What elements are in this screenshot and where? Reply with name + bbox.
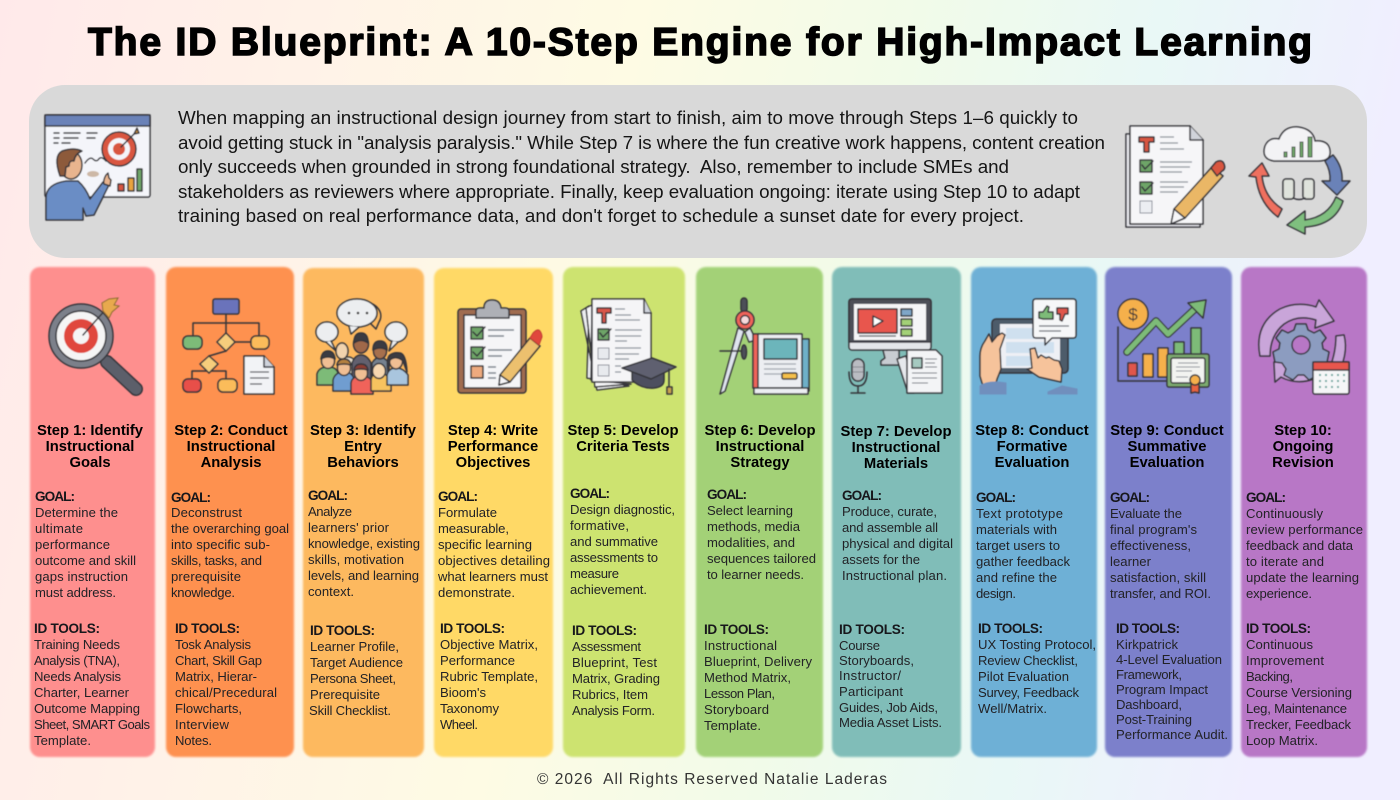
id tools text: Storyboard: [704, 702, 769, 717]
goal text: achievement.: [570, 582, 647, 597]
icon: ROI chart and certificate: [1118, 299, 1209, 393]
icon: revision cycle with gear and calendar: [1259, 300, 1349, 394]
heading: Step 4: Write: [448, 423, 538, 439]
id tools text: Objective Matrix,: [440, 637, 538, 652]
heading: Step 9: Conduct: [1110, 423, 1224, 439]
id tools text: Improvement: [1246, 653, 1324, 668]
id tools text: Persona Sheet,: [310, 671, 396, 686]
heading: Step 8: Conduct: [975, 423, 1089, 439]
id tools text: Course Versioning: [1246, 685, 1352, 700]
heading: Instructional: [716, 439, 804, 455]
goal text: specific learning: [438, 537, 532, 552]
goal text: demonstrate.: [438, 585, 515, 600]
icon: test papers and graduation cap: [581, 299, 676, 394]
id tools text: ID TOOLS:: [1116, 621, 1180, 636]
goal text: ultimate: [35, 521, 83, 536]
goal text: prerequisite: [171, 569, 241, 584]
goal text: modalities, and: [707, 535, 795, 550]
id tools text: Rubrics, Item: [572, 687, 648, 702]
heading: Materials: [864, 456, 928, 472]
step 4 column: [434, 268, 553, 757]
goal text: GOAL:: [35, 489, 75, 504]
icon: checklist and pencil: [1126, 126, 1225, 227]
goal text: GOAL:: [1246, 490, 1286, 505]
id tools text: Analysis Form.: [572, 703, 655, 718]
heading: Step 6: Develop: [704, 423, 816, 439]
id tools text: ID TOOLS:: [440, 621, 505, 636]
heading: [174, 423, 288, 471]
id tools text: ID TOOLS:: [34, 621, 100, 636]
id tools text: Template.: [704, 718, 761, 733]
icon: ROI chart and certificate: $: [1128, 305, 1138, 324]
goal text: Design diagnostic,: [570, 502, 675, 517]
goal text: transfer, and ROI.: [1110, 586, 1211, 601]
heading: [37, 423, 144, 471]
goal text: effectiveness,: [1110, 538, 1191, 553]
id tools text: ID TOOLS:: [310, 623, 375, 638]
goal text: and assemble all: [842, 520, 938, 535]
id tools text: Interview: [175, 717, 230, 732]
heading: [975, 423, 1089, 471]
goal text: Determine the: [35, 505, 118, 520]
intro text: [178, 107, 1105, 226]
goal text: [976, 490, 1070, 601]
id tools text: Training Needs: [34, 637, 120, 652]
goal text: objectives detailing: [438, 553, 550, 568]
id tools text: Taxonomy: [440, 701, 499, 716]
heading: Objectives: [456, 455, 530, 471]
id tools text: Tosk Analysis: [175, 637, 251, 652]
goal text: [437, 489, 550, 600]
goal text: satisfaction, skill: [1110, 570, 1206, 585]
id tools text: Notes.: [175, 733, 212, 748]
goal text: target users to: [976, 538, 1060, 553]
heading: Evaluation: [1130, 455, 1204, 471]
id tools text: Lesson Plan,: [704, 686, 775, 701]
id tools text: Framework,: [1116, 667, 1182, 682]
goal text: gather feedback: [976, 554, 1070, 569]
id tools text: Guides, Job Aids,: [839, 700, 938, 715]
id tools text: [309, 623, 403, 718]
intro text: When mapping an instructional design journey from start to finish, aim to move through Steps 1–6 quickly to: [178, 107, 1078, 128]
icon: target magnifier: [49, 298, 136, 389]
goal text: [1246, 490, 1363, 601]
id tools text: Bioom's: [440, 685, 486, 700]
heading: [840, 424, 952, 472]
goal text: Formulate: [438, 505, 497, 520]
icon: compass and book: [720, 298, 809, 394]
heading: [1272, 423, 1334, 471]
id tools text: [704, 622, 812, 733]
id tools text: [1246, 621, 1352, 748]
intro text: only succeeds when grounded in strong foundational strategy. Also, remember to include SMEs and: [178, 156, 1009, 177]
heading: Revision: [1272, 455, 1334, 471]
goal text: knowledge, existing: [308, 536, 420, 551]
id tools text: Learner Profile,: [310, 639, 399, 654]
goal text: assets for the: [842, 552, 920, 567]
heading: [448, 423, 538, 471]
id tools text: Template.: [34, 733, 91, 748]
heading: Step 5: Develop: [567, 423, 679, 439]
heading: Analysis: [201, 455, 261, 471]
id tools text: Storyboards,: [839, 653, 914, 668]
goal text: measure: [570, 566, 619, 581]
id tools text: Program Impact: [1116, 682, 1208, 697]
goal text: levels, and learning: [308, 568, 419, 583]
id tools text: Pilot Evaluation: [978, 669, 1069, 684]
goal text: context.: [308, 584, 354, 599]
heading: [310, 423, 417, 471]
id tools text: ID TOOLS:: [704, 622, 769, 637]
goal text: sequences tailored: [707, 551, 816, 566]
id tools text: Target Audience: [310, 655, 403, 670]
goal text: to iterate and: [1246, 554, 1324, 569]
goal text: GOAL:: [842, 488, 882, 503]
id tools text: Instructor/: [839, 668, 901, 683]
heading: Entry: [344, 439, 383, 455]
goal text: into specific sub-: [171, 537, 270, 552]
footer: © 2026 All Rights Reserved Natalie Laderas: [537, 771, 887, 788]
goal text: design.: [976, 586, 1016, 601]
heading: Strategy: [730, 455, 790, 471]
heading: Performance: [448, 439, 538, 455]
goal text: GOAL:: [976, 490, 1016, 505]
heading: Criteria Tests: [576, 439, 670, 455]
id tools text: 4-Level Evaluation: [1116, 652, 1222, 667]
heading: Formative: [997, 439, 1067, 455]
goal text: update the learning: [1246, 570, 1359, 585]
goal text: GOAL:: [707, 487, 747, 502]
intro text: avoid getting stuck in "analysis paralysis." While Step 7 is where the fun creative work happens, content creation: [178, 132, 1105, 153]
step 2 column: [166, 267, 294, 757]
id tools text: Media Asset Lists.: [839, 715, 942, 730]
goal text: Text prototype: [976, 506, 1063, 521]
id tools text: Post-Training: [1116, 712, 1192, 727]
id tools text: Survey, Feedback: [978, 685, 1079, 700]
id tools text: Blueprint, Test: [572, 655, 657, 670]
icon: learners group: [316, 299, 408, 394]
heading: [704, 423, 816, 471]
heading: Step 1: Identify: [37, 423, 144, 439]
id tools text: Prerequisite: [310, 687, 380, 702]
goal text: review performance: [1246, 522, 1363, 537]
goal text: GOAL:: [308, 488, 348, 503]
id tools text: [34, 621, 150, 748]
icon: tablet with feedback bubble: [980, 299, 1077, 394]
goal text: GOAL:: [171, 490, 211, 505]
goal text: experience.: [1246, 586, 1312, 601]
id tools text: ID TOOLS:: [978, 621, 1043, 636]
id tools text: [978, 621, 1096, 716]
id tools text: [839, 622, 942, 730]
id tools text: Leg, Maintenance: [1246, 701, 1347, 716]
heading: Summative: [1128, 439, 1206, 455]
goal text: knowledge.: [171, 585, 235, 600]
id tools text: ID TOOLS:: [572, 623, 637, 638]
heading: Behaviors: [327, 455, 399, 471]
id tools text: Course: [839, 638, 880, 653]
icon: clipboard checklist: [458, 300, 542, 393]
goal text: GOAL:: [438, 489, 478, 504]
id tools text: UX Tosting Protocol,: [978, 637, 1096, 652]
goal text: and refine the: [976, 570, 1057, 585]
id tools text: Blueprint, Delivery: [704, 654, 812, 669]
goal text: Continuously: [1246, 506, 1323, 521]
id tools text: Analysis (TNA),: [34, 653, 120, 668]
icon: flowchart: [183, 299, 274, 394]
id tools text: [440, 621, 538, 732]
id tools text: Wheel.: [440, 717, 478, 732]
goal text: Select learning: [707, 503, 793, 518]
heading: [1110, 423, 1224, 471]
heading: Evaluation: [995, 455, 1069, 471]
goal text: measurable,: [438, 521, 509, 536]
icon: data cycle: [1249, 127, 1350, 234]
id tools text: Backing,: [1246, 669, 1293, 684]
step 10 column: [1241, 267, 1367, 757]
goal text: formative,: [570, 518, 629, 533]
heading: Step 10:: [1274, 423, 1332, 439]
goal text: Evaluate the: [1110, 506, 1182, 521]
id tools text: Trecker, Feedback: [1246, 717, 1351, 732]
goal text: performance: [35, 537, 110, 552]
goal text: methods, media: [707, 519, 801, 534]
step 6 column: [696, 267, 823, 757]
heading: Instructional: [852, 440, 940, 456]
step 1 column: [30, 267, 155, 757]
id tools text: Charter, Learner: [34, 685, 130, 700]
step 5 column: [563, 267, 685, 757]
id tools text: [1116, 621, 1228, 742]
id tools text: chical/Precedural: [175, 685, 277, 700]
title: The ID Blueprint: A 10-Step Engine for High-Impact Learning: [88, 21, 1312, 64]
goal text: assessments to: [570, 550, 658, 565]
heading: Step 7: Develop: [840, 424, 952, 440]
goal text: to learner needs.: [707, 567, 804, 582]
id tools text: Rubric Template,: [440, 669, 538, 684]
goal text: GOAL:: [570, 486, 610, 501]
id tools text: [175, 621, 277, 748]
heading: Ongoing: [1273, 439, 1333, 455]
id tools text: ID TOOLS:: [1246, 621, 1311, 636]
heading: Goals: [69, 455, 111, 471]
id tools text: Method Matrix,: [704, 670, 791, 685]
id tools text: Sheet, SMART Goals: [34, 717, 150, 732]
goal text: and summative: [570, 534, 658, 549]
goal text: final program's: [1110, 522, 1197, 537]
goal text: GOAL:: [1110, 490, 1150, 505]
id tools text: Performance Audit.: [1116, 727, 1228, 742]
heading: Instructional: [187, 439, 275, 455]
goal text: Instructional plan.: [842, 568, 947, 583]
id tools text: Instructional: [704, 638, 777, 653]
id tools text: Dashboard,: [1116, 697, 1182, 712]
id tools text: Needs Analysis: [34, 669, 121, 684]
id tools text: Matrix, Grading: [572, 671, 660, 686]
goal text: [570, 486, 675, 597]
id tools text: Continuous: [1246, 637, 1313, 652]
goal text: learners' prior: [308, 520, 390, 535]
step 8 column: [971, 267, 1097, 757]
goal text: must address.: [35, 585, 116, 600]
goal text: [1110, 490, 1211, 601]
id tools text: Chart, Skill Gap: [175, 653, 262, 668]
goal text: Deconstrust: [171, 505, 242, 520]
id tools text: Well/Matrix.: [978, 701, 1047, 716]
heading: Step 3: Identify: [310, 423, 417, 439]
goal text: learner: [1110, 554, 1152, 569]
panel: intro: [29, 85, 1367, 258]
heading: [567, 423, 679, 455]
goal text: feedback and data: [1246, 538, 1354, 553]
id tools text: Review Checklist,: [978, 653, 1078, 668]
id tools text: Outcome Mapping: [34, 701, 140, 716]
id tools text: Kirkpatrick: [1116, 637, 1178, 652]
goal text: what learners must: [437, 569, 548, 584]
goal text: gaps instruction: [35, 569, 128, 584]
id tools text: Skill Checklist.: [309, 703, 391, 718]
id tools text: Performance: [440, 653, 515, 668]
id tools text: Flowcharts,: [175, 701, 242, 716]
id tools text: [572, 623, 660, 718]
goal text: skills, tasks, and: [171, 553, 262, 568]
goal text: [308, 488, 420, 599]
id tools text: ID TOOLS:: [175, 621, 240, 636]
intro text: training based on real performance data, and don't forget to schedule a sunset date for every project.: [178, 205, 1024, 226]
goal text: Produce, curate,: [842, 504, 937, 519]
id tools text: Participant: [839, 684, 903, 699]
goal text: physical and digital: [842, 536, 953, 551]
goal text: Analyze: [308, 504, 352, 519]
step 9 column: [1105, 267, 1232, 757]
step 3 column: [303, 268, 424, 757]
id tools text: Matrix, Hierar-: [175, 669, 257, 684]
goal text: outcome and skill: [35, 553, 136, 568]
goal text: [842, 488, 953, 583]
heading: Step 2: Conduct: [174, 423, 288, 439]
id tools text: Assessment: [572, 639, 641, 654]
goal text: skills, motivation: [308, 552, 404, 567]
id tools text: ID TOOLS:: [839, 622, 905, 637]
intro text: stakeholders as reviewers where appropriate. Finally, keep evaluation ongoing: iterate using Step 10 to adapt: [178, 181, 1081, 202]
goal text: the overarching goal: [171, 521, 289, 536]
icon: presenter at whiteboard: [45, 115, 150, 220]
goal text: [707, 487, 816, 582]
goal text: materials with: [976, 522, 1057, 537]
icon: monitor, microphone and documents: [849, 299, 942, 393]
goal text: [171, 490, 289, 600]
id tools text: Loop Matrix.: [1246, 733, 1318, 748]
step 7 column: [832, 267, 961, 757]
goal text: [35, 489, 136, 600]
heading: Instructional: [46, 439, 134, 455]
